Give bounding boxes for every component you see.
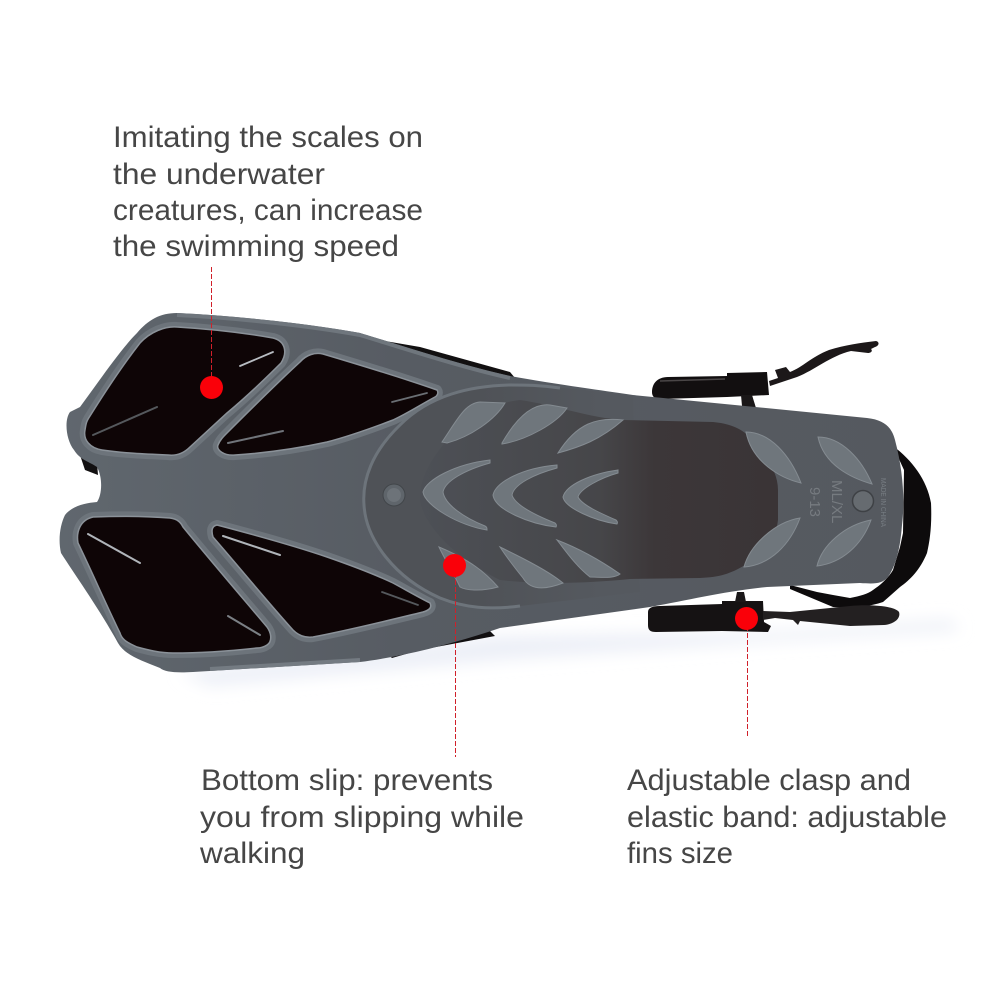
plate rim: [364, 385, 560, 608]
bottom strap: [763, 605, 899, 626]
dark sole pad: [420, 400, 778, 583]
callout: adjustable clasp: [627, 607, 947, 870]
leader line: [210, 267, 212, 387]
panel: lower inner web: [212, 525, 431, 637]
marker dot: [443, 554, 466, 577]
fin body: [60, 313, 903, 672]
callout text: walking: [199, 837, 305, 870]
plate surface: [364, 385, 640, 608]
callout text: [627, 764, 947, 870]
bottom buckle: [648, 601, 771, 632]
underside ribs: [80, 341, 515, 658]
callout: bottom slip: [199, 554, 524, 870]
size mark 9-13: 9-13: [806, 487, 823, 517]
logo stamp: [852, 490, 874, 512]
scales: [423, 402, 872, 590]
outer outline: [60, 313, 903, 672]
callout text: you from slipping while: [200, 801, 524, 834]
callout text: fins size: [627, 837, 733, 870]
callout text: Imitating the scales on: [113, 121, 423, 154]
top and bottom rim highlights: [177, 315, 510, 378]
callout text: the swimming speed: [113, 230, 399, 263]
leader line: [454, 566, 456, 757]
web ridges: [88, 352, 427, 635]
made in china mark: MADE IN CHINA: [879, 478, 886, 527]
callout: scales: [113, 121, 423, 399]
panel: lower outer web: [78, 516, 271, 653]
callout text: elastic band: adjustable: [627, 801, 947, 834]
callout text: creatures, can increase: [113, 194, 423, 227]
marker dot: [200, 376, 223, 399]
top strap: [769, 341, 879, 386]
foot plate: [364, 385, 886, 608]
callout text: [113, 121, 423, 263]
heel strap: [790, 446, 931, 607]
callout text: Bottom slip: prevents: [201, 764, 493, 797]
size mark ML/XL: ML/XL: [828, 480, 845, 523]
callout text: Adjustable clasp and: [627, 764, 911, 797]
callout text: [199, 764, 524, 870]
peg: [383, 484, 405, 506]
leader line: [746, 619, 748, 737]
adjustable heel strap and buckles: [648, 341, 931, 632]
panel: upper outer web: [85, 327, 285, 455]
panel rims: [78, 327, 438, 653]
callout text: the underwater: [113, 158, 325, 191]
marker dot: [735, 607, 758, 630]
panel: upper inner web: [218, 353, 438, 455]
top buckle: [652, 372, 769, 399]
ground shadow: [180, 620, 960, 686]
